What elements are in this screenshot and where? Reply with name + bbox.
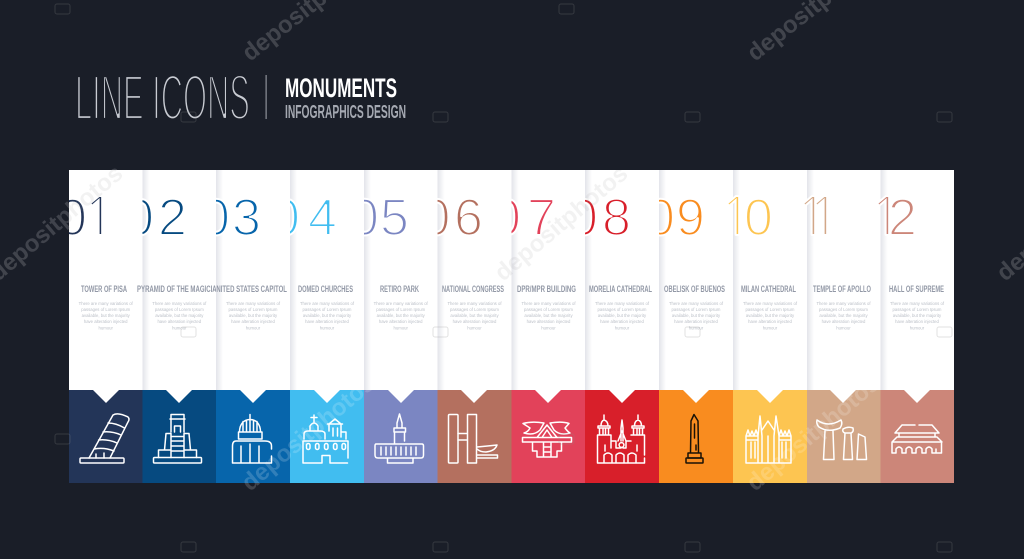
- subheading: infographics design: INFOGRAPHICS DESIGN: [285, 102, 406, 122]
- number 10: 1: [720, 191, 752, 243]
- title: RETIRO PARK: [380, 284, 419, 295]
- title: UNITED STATES CAPITOL: [212, 284, 287, 295]
- body text: available, but the majority: [819, 313, 868, 318]
- panel 6: national congress: [438, 170, 512, 483]
- body text: have alteration injected: [600, 319, 644, 324]
- body text: have alteration injected: [822, 319, 866, 324]
- number 07: 07: [492, 189, 556, 247]
- icon: obelisk: [686, 414, 703, 463]
- title: PYRAMID OF THE MAGICIAN: [137, 284, 221, 295]
- body text: There are many variations of: [226, 301, 281, 306]
- body text: have alteration injected: [895, 319, 939, 324]
- body text: have alteration injected: [527, 319, 571, 324]
- panel 12: hall of supreme: [870, 170, 954, 483]
- body text: passages of Lorem Ipsum: [450, 307, 499, 312]
- number 05: 05: [350, 189, 409, 247]
- body text: humour: [910, 326, 925, 330]
- body text: have alteration injected: [379, 319, 423, 324]
- body text: available, but the majority: [672, 313, 721, 318]
- body text: have alteration injected: [157, 319, 202, 324]
- number 06: 06: [422, 189, 483, 247]
- body text: available, but the majority: [524, 313, 573, 318]
- number 03: 03: [201, 189, 261, 247]
- icon: dpr/mpr building: [522, 422, 572, 457]
- body text: passages of Lorem Ipsum: [229, 307, 278, 312]
- icon: pyramid: [154, 414, 202, 463]
- body text: humour: [393, 326, 408, 330]
- title: OBELISK OF BUENOS: [664, 284, 725, 295]
- number 12: 1: [870, 191, 902, 243]
- body text: passages of Lorem Ipsum: [303, 307, 352, 312]
- body text: available, but the majority: [377, 313, 426, 318]
- body text: have alteration injected: [231, 319, 275, 324]
- number 08: 08: [569, 189, 631, 247]
- icon: national congress: [448, 414, 498, 463]
- title: DOMED CHURCHES: [298, 284, 353, 295]
- title: NATIONAL CONGRESS: [442, 284, 504, 295]
- number 11: 1: [808, 191, 840, 243]
- panel 5: retiro park: [364, 170, 438, 483]
- body text: have alteration injected: [84, 319, 128, 324]
- panel 9: obelisk of buenos: [659, 170, 733, 483]
- heading: monuments: MONUMENTS: [285, 73, 397, 103]
- body text: available, but the majority: [155, 313, 204, 318]
- panel 11: temple of apollo: [796, 170, 880, 483]
- body text: humour: [320, 326, 335, 330]
- body text: There are many variations of: [374, 301, 429, 306]
- body text: There are many variations of: [521, 301, 576, 306]
- body text: have alteration injected: [674, 319, 718, 324]
- body text: have alteration injected: [453, 319, 497, 324]
- title: TOWER OF PISA: [81, 284, 127, 295]
- body text: available, but the majority: [82, 313, 131, 318]
- body text: humour: [172, 326, 187, 330]
- heading divider: [266, 75, 267, 119]
- panel 2: pyramid of the magician: [137, 170, 216, 483]
- body text: humour: [615, 326, 630, 330]
- number 01: 1: [83, 191, 115, 243]
- body text: available, but the majority: [598, 313, 647, 318]
- number 02: 02: [125, 189, 187, 247]
- body text: humour: [763, 326, 778, 330]
- panel 1: tower of pisa: [69, 170, 142, 483]
- title: MORELIA CATHEDRAL: [589, 284, 652, 295]
- body text: passages of Lorem Ipsum: [819, 307, 868, 312]
- panel 4: domed churches: [290, 170, 364, 483]
- panel 7: dpr/mpr building: [512, 170, 585, 483]
- number 04: 04: [271, 189, 337, 247]
- body text: There are many variations of: [816, 301, 871, 306]
- body text: passages of Lorem Ipsum: [746, 307, 795, 312]
- panel 3: united states capitol: [216, 170, 290, 483]
- body text: available, but the majority: [303, 313, 352, 318]
- number 10: 0: [744, 189, 773, 247]
- title: DPR/MPR BUILDING: [517, 284, 576, 295]
- body text: There are many variations of: [447, 301, 502, 306]
- icon: hall of supreme: [892, 425, 942, 453]
- body text: humour: [689, 326, 704, 330]
- title: MILAN CATHEDRAL: [741, 284, 796, 295]
- body text: passages of Lorem Ipsum: [376, 307, 426, 312]
- body text: available, but the majority: [229, 313, 278, 318]
- body text: There are many variations of: [595, 301, 650, 306]
- body text: There are many variations of: [79, 301, 134, 306]
- icon: milan cathedral: [746, 416, 791, 463]
- body text: There are many variations of: [152, 301, 207, 306]
- number 12: 2: [888, 189, 917, 247]
- body text: There are many variations of: [743, 301, 798, 306]
- body text: have alteration injected: [305, 319, 349, 324]
- body text: There are many variations of: [669, 301, 724, 306]
- panel 8: morelia cathedral: [585, 170, 659, 483]
- title: HALL OF SUPREME: [889, 284, 944, 295]
- body text: passages of Lorem Ipsum: [155, 307, 204, 312]
- watermark on dark and coloured areas: depositphotos: [237, 370, 380, 497]
- panel 10: milan cathedral: [720, 170, 807, 483]
- body text: passages of Lorem Ipsum: [893, 307, 942, 312]
- body text: humour: [246, 326, 261, 330]
- heading: line icons: LINE ICONS: [75, 62, 250, 134]
- body text: passages of Lorem Ipsum: [598, 307, 647, 312]
- body text: humour: [541, 326, 556, 330]
- watermark on dark and coloured areas: depositphotos: [742, 370, 885, 497]
- number 09: 09: [646, 189, 705, 247]
- body text: humour: [467, 326, 482, 330]
- watermark on white panels: depositphotos: [490, 160, 633, 287]
- body text: available, but the majority: [893, 313, 942, 318]
- body text: There are many variations of: [300, 301, 355, 306]
- body text: humour: [836, 326, 851, 330]
- icon: domed churches: [303, 415, 348, 463]
- body text: available, but the majority: [450, 313, 499, 318]
- body text: passages of Lorem Ipsum: [672, 307, 721, 312]
- body text: There are many variations of: [890, 301, 945, 306]
- icon: retiro park: [375, 414, 424, 463]
- number 11: 1: [796, 191, 828, 243]
- body text: have alteration injected: [748, 319, 792, 324]
- body text: humour: [98, 326, 113, 330]
- number 01: 0: [58, 189, 87, 247]
- body text: available, but the majority: [746, 313, 795, 318]
- icon: temple of apollo: [817, 420, 866, 460]
- icon: capitol: [232, 414, 272, 463]
- body text: passages of Lorem Ipsum: [81, 307, 131, 312]
- title: TEMPLE OF APOLLO: [813, 284, 871, 295]
- icon: morelia cathedral: [598, 415, 644, 463]
- watermark on white panels: [69, 170, 627, 280]
- body text: passages of Lorem Ipsum: [524, 307, 573, 312]
- icon: tower of pisa: [80, 414, 129, 463]
